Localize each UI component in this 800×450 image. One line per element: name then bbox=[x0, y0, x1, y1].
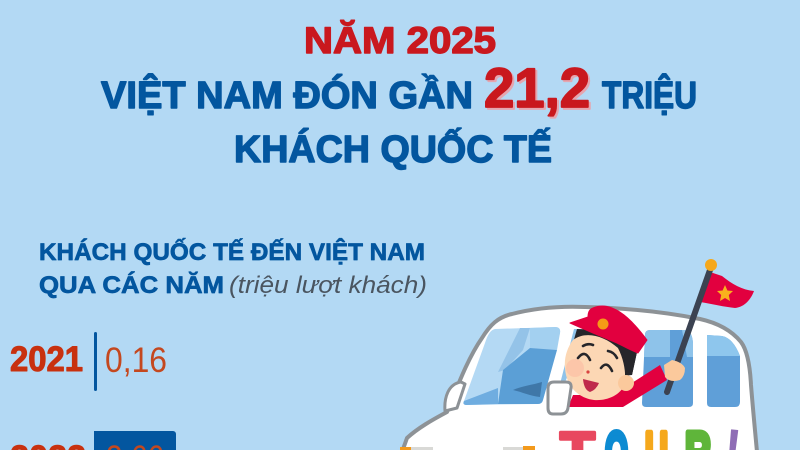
hat badge bbox=[598, 318, 608, 330]
hair side bbox=[618, 348, 637, 375]
eyes and brows bbox=[578, 344, 617, 371]
year label 2021: 2021 bbox=[10, 340, 83, 379]
rear window bbox=[642, 330, 693, 407]
mouth bbox=[583, 379, 599, 392]
bar 2022 bbox=[94, 431, 176, 450]
left mirror bbox=[445, 382, 465, 411]
title word: million: TRIỆU bbox=[602, 73, 697, 117]
title line: international visitors: KHÁCH QUỐC TẾ bbox=[234, 126, 552, 171]
heading line two: QUA CÁC NĂM bbox=[39, 271, 224, 299]
bar 2021 bbox=[94, 332, 97, 391]
nose bbox=[586, 370, 590, 374]
bus lettering: tour bbox=[558, 429, 738, 450]
flag star bbox=[717, 285, 733, 301]
right mirror bbox=[548, 382, 571, 414]
title bbox=[101, 20, 697, 171]
unit note: (triệu lượt khách) bbox=[229, 272, 427, 299]
driver side glass bbox=[561, 329, 584, 380]
ear bbox=[618, 375, 634, 391]
illustration: tour bus bbox=[400, 259, 757, 450]
bar chart bbox=[10, 332, 176, 450]
highlight number shadow: 21,2 bbox=[486, 58, 592, 121]
title line: Vietnam welcomes nearly: VIỆT NAM ĐÓN GẦN bbox=[101, 73, 473, 117]
value 2021: 0,16 bbox=[105, 341, 167, 380]
back window bbox=[707, 335, 740, 407]
driver bbox=[565, 306, 667, 407]
flag bbox=[664, 259, 754, 392]
hand bbox=[664, 360, 685, 381]
pole finial bbox=[705, 259, 717, 271]
windshield bbox=[463, 327, 560, 405]
bus body bbox=[402, 307, 757, 450]
flag pole bbox=[667, 270, 710, 392]
arm and body bbox=[568, 365, 667, 407]
flag cloth bbox=[700, 272, 754, 308]
highlight number: 21,2 bbox=[484, 56, 590, 119]
hat bbox=[570, 306, 647, 353]
bus lettering: left fragments bbox=[400, 446, 535, 450]
hair back bbox=[573, 329, 637, 376]
title line: year: NĂM 2025 bbox=[304, 20, 496, 61]
chart heading bbox=[39, 238, 427, 299]
face bbox=[565, 335, 625, 400]
heading line one: KHÁCH QUỐC TẾ ĐẾN VIỆT NAM bbox=[39, 238, 425, 266]
cheek bbox=[566, 359, 584, 377]
